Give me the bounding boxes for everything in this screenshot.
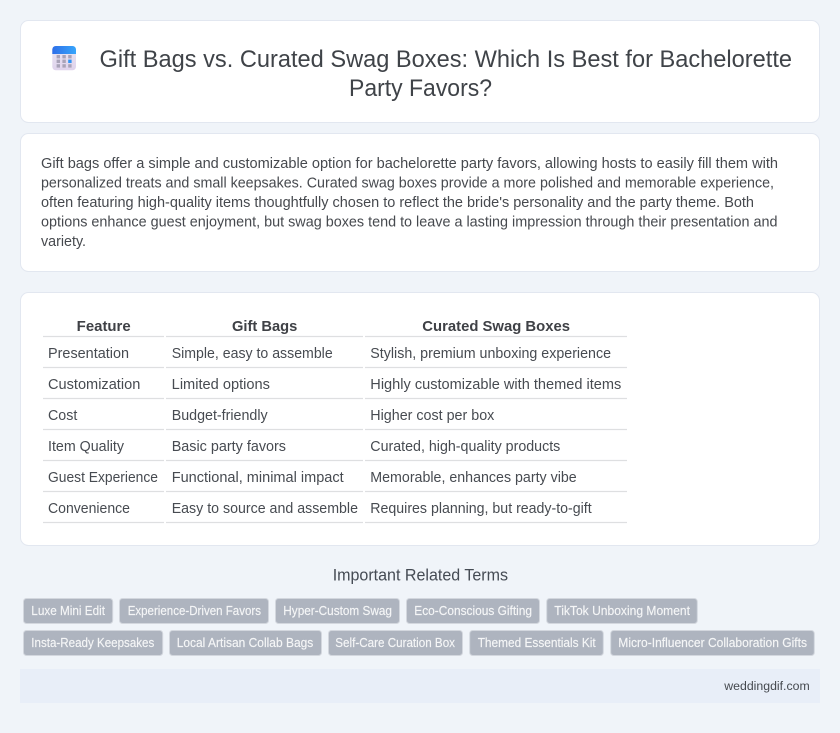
- tag: Eco-Conscious Gifting: [414, 604, 532, 618]
- tag: Insta-Ready Keepsakes: [31, 636, 154, 650]
- footer: weddingdif.com: [723, 679, 810, 693]
- panel: comparison table: [20, 292, 820, 546]
- footer: [20, 669, 820, 703]
- title: Gift Bags vs. Curated Swag Boxes: Which Is Best for Bachelorette: [100, 46, 792, 73]
- table row: item quality: Item Quality: [48, 439, 125, 455]
- table header row: [77, 319, 570, 335]
- heading: important related terms: Important Related Terms: [333, 567, 508, 585]
- table row: convenience: Convenience: [48, 501, 130, 517]
- table row: guest experience: Memorable, enhances party vibe: [370, 470, 577, 486]
- table row: convenience: [48, 501, 592, 517]
- tag: [170, 630, 322, 656]
- tag: Luxe Mini Edit: [31, 604, 105, 618]
- tag: [547, 598, 697, 624]
- table row: customization: Highly customizable with themed items: [370, 377, 621, 393]
- table row: guest experience: Guest Experience: [48, 470, 158, 486]
- table header row: Gift Bags: [232, 319, 297, 335]
- tag: Self-Care Curation Box: [335, 636, 456, 650]
- tag: [276, 598, 400, 624]
- tag: [328, 630, 462, 656]
- tag: Themed Essentials Kit: [478, 636, 596, 650]
- text block: introduction paragraph: personalized treats and small keepsakes. Curated swag boxes provide a more polished and memorable experience,: [41, 176, 774, 192]
- text block: introduction paragraph: [41, 156, 778, 250]
- table row: convenience: Easy to source and assemble: [172, 501, 358, 517]
- table row: item quality: Curated, high-quality products: [370, 439, 560, 455]
- tag: Micro-Influencer Collaboration Gifts: [618, 636, 807, 650]
- table row: customization: Limited options: [172, 377, 270, 393]
- table header row: Curated Swag Boxes: [422, 319, 570, 335]
- table row: presentation: Presentation: [48, 346, 129, 362]
- table row: customization: [48, 377, 621, 393]
- icon: calendar: [52, 46, 76, 70]
- table row: customization: Customization: [48, 377, 140, 393]
- tag: Hyper-Custom Swag: [283, 604, 392, 618]
- tag: [120, 598, 268, 624]
- tag: [406, 598, 540, 624]
- tag list: related terms: [24, 598, 814, 656]
- table row: presentation: [48, 346, 611, 362]
- tag: Experience-Driven Favors: [128, 604, 261, 618]
- table row: guest experience: Functional, minimal impact: [172, 470, 344, 486]
- table row: cost: Cost: [48, 408, 77, 424]
- tag: [611, 630, 814, 656]
- table row: guest experience: [48, 470, 577, 486]
- tag: [24, 598, 113, 624]
- text block: introduction paragraph: often featuring high-quality items thoughtfully chosen to reflect the bride's personality and the party theme. Both: [41, 195, 754, 211]
- table row: item quality: [48, 439, 560, 455]
- title: Party Favors?: [349, 75, 492, 102]
- table row: item quality: Basic party favors: [172, 439, 286, 455]
- panel: introduction: [20, 134, 820, 272]
- panel: title header: [20, 20, 820, 122]
- text block: introduction paragraph: Gift bags offer a simple and customizable option for bachelorette party favors, allowing hosts to easily fill them with: [41, 156, 778, 172]
- tag: [24, 630, 163, 656]
- tag: [470, 630, 603, 656]
- table row: presentation: Simple, easy to assemble: [172, 346, 333, 362]
- table row: cost: Budget-friendly: [172, 408, 268, 424]
- table row: cost: [48, 408, 495, 424]
- table row: cost: Higher cost per box: [370, 408, 495, 424]
- table header row: Feature: [77, 319, 131, 335]
- table row: convenience: Requires planning, but ready-to-gift: [370, 501, 592, 517]
- text block: introduction paragraph: options enhance guest enjoyment, but swag boxes tend to leave a lasting impression through their presentation and: [41, 214, 778, 230]
- title: [100, 46, 792, 102]
- table row: presentation: Stylish, premium unboxing experience: [370, 346, 611, 362]
- tag: TikTok Unboxing Moment: [554, 604, 690, 618]
- text block: introduction paragraph: variety.: [41, 234, 86, 250]
- tag: Local Artisan Collab Bags: [177, 636, 313, 650]
